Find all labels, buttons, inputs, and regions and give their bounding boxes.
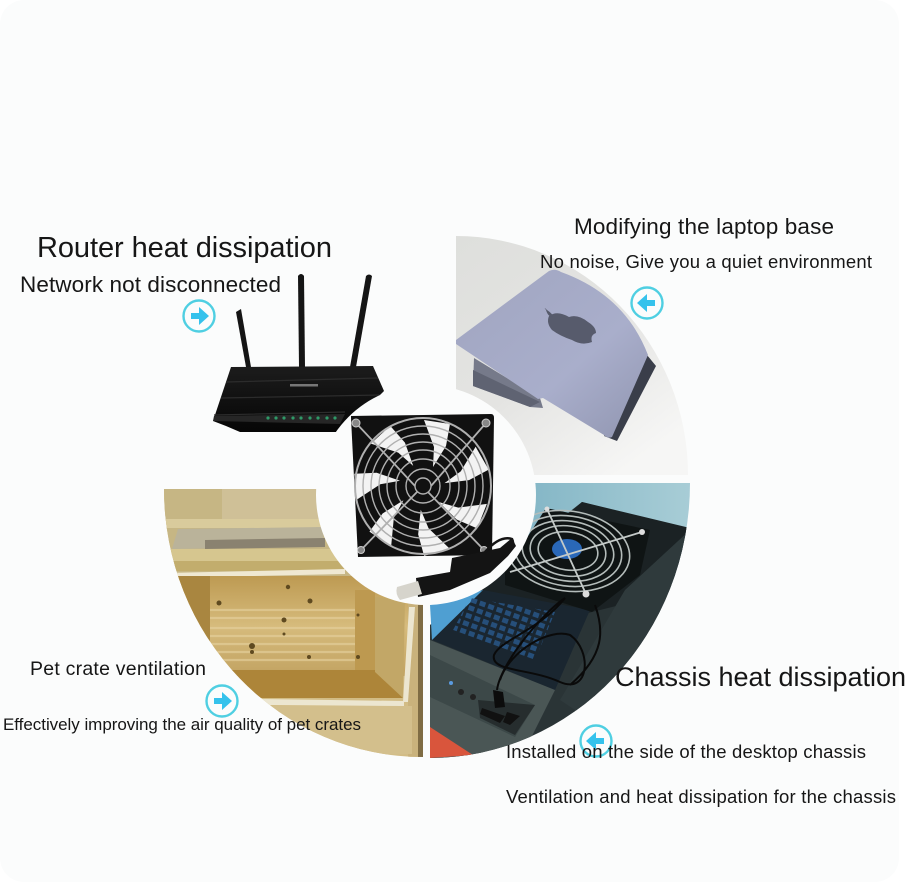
- fan frame: [351, 414, 494, 557]
- heading: pet crate ventilation: Pet crate ventilation: [30, 658, 206, 680]
- text: network not disconnected: Network not disconnected: [20, 272, 281, 297]
- crate back wall: [178, 576, 408, 676]
- panel: pet crate: [164, 489, 423, 757]
- crate upper panel: [164, 489, 352, 578]
- chassis fan: [501, 503, 650, 612]
- panel: chassis: [430, 483, 692, 758]
- chassis fan hub: [552, 539, 582, 559]
- router body: [213, 366, 384, 432]
- window blue dots: [452, 598, 555, 660]
- arrow icon: laptop: [632, 288, 662, 318]
- crate base fill: [164, 489, 423, 757]
- chassis red base: [430, 727, 473, 758]
- panel: router: [213, 274, 384, 432]
- crate outer right post: [408, 604, 419, 757]
- crate floor: [232, 670, 403, 698]
- text: no noise: No noise, Give you a quiet environment: [540, 251, 872, 272]
- heading: router heat dissipation: Router heat dissipation: [37, 232, 332, 264]
- chassis cable: [494, 598, 600, 690]
- fan screws: [352, 419, 490, 554]
- chassis case body: [430, 502, 690, 758]
- chassis front panel: [430, 640, 555, 758]
- apple logo: [545, 308, 596, 344]
- crate glass window: [172, 527, 325, 549]
- arrow icon: chassis: [580, 726, 612, 756]
- laptop quadrant backdrop: [456, 236, 688, 475]
- crate knots: [216, 585, 360, 659]
- text: ventilation for chassis: Ventilation and heat dissipation for the chassis: [506, 786, 896, 807]
- crate white frame: [262, 699, 404, 706]
- router antennas: [236, 274, 372, 367]
- heading: modifying the laptop base: Modifying the laptop base: [574, 214, 834, 239]
- laptop top surface: [456, 270, 648, 438]
- laptop underside edge: [604, 355, 656, 441]
- heading: chassis heat dissipation: Chassis heat dissipation: [615, 662, 906, 692]
- arrow icon: pet crate: [206, 686, 238, 716]
- crate white rail: [177, 569, 345, 576]
- usb cable: [396, 538, 516, 600]
- center white circle: [316, 385, 536, 605]
- arrow icon: router: [184, 300, 214, 332]
- text: air quality: Effectively improving the air quality of pet crates: [3, 715, 361, 734]
- center fan product: [350, 414, 516, 600]
- fan blades: [350, 420, 492, 560]
- router status lights: [266, 416, 337, 420]
- chassis window: [432, 590, 590, 690]
- chassis backdrop: [528, 483, 690, 583]
- text: installed on side: Installed on the side of the desktop chassis: [506, 741, 866, 762]
- crate bottom front: [271, 706, 412, 754]
- front ports: [480, 708, 520, 725]
- usb plug: [396, 581, 422, 600]
- laptop stand: [473, 358, 543, 408]
- infographic canvas: [4, 218, 904, 807]
- panel: laptop base: [456, 236, 688, 475]
- fan grille: [355, 418, 491, 554]
